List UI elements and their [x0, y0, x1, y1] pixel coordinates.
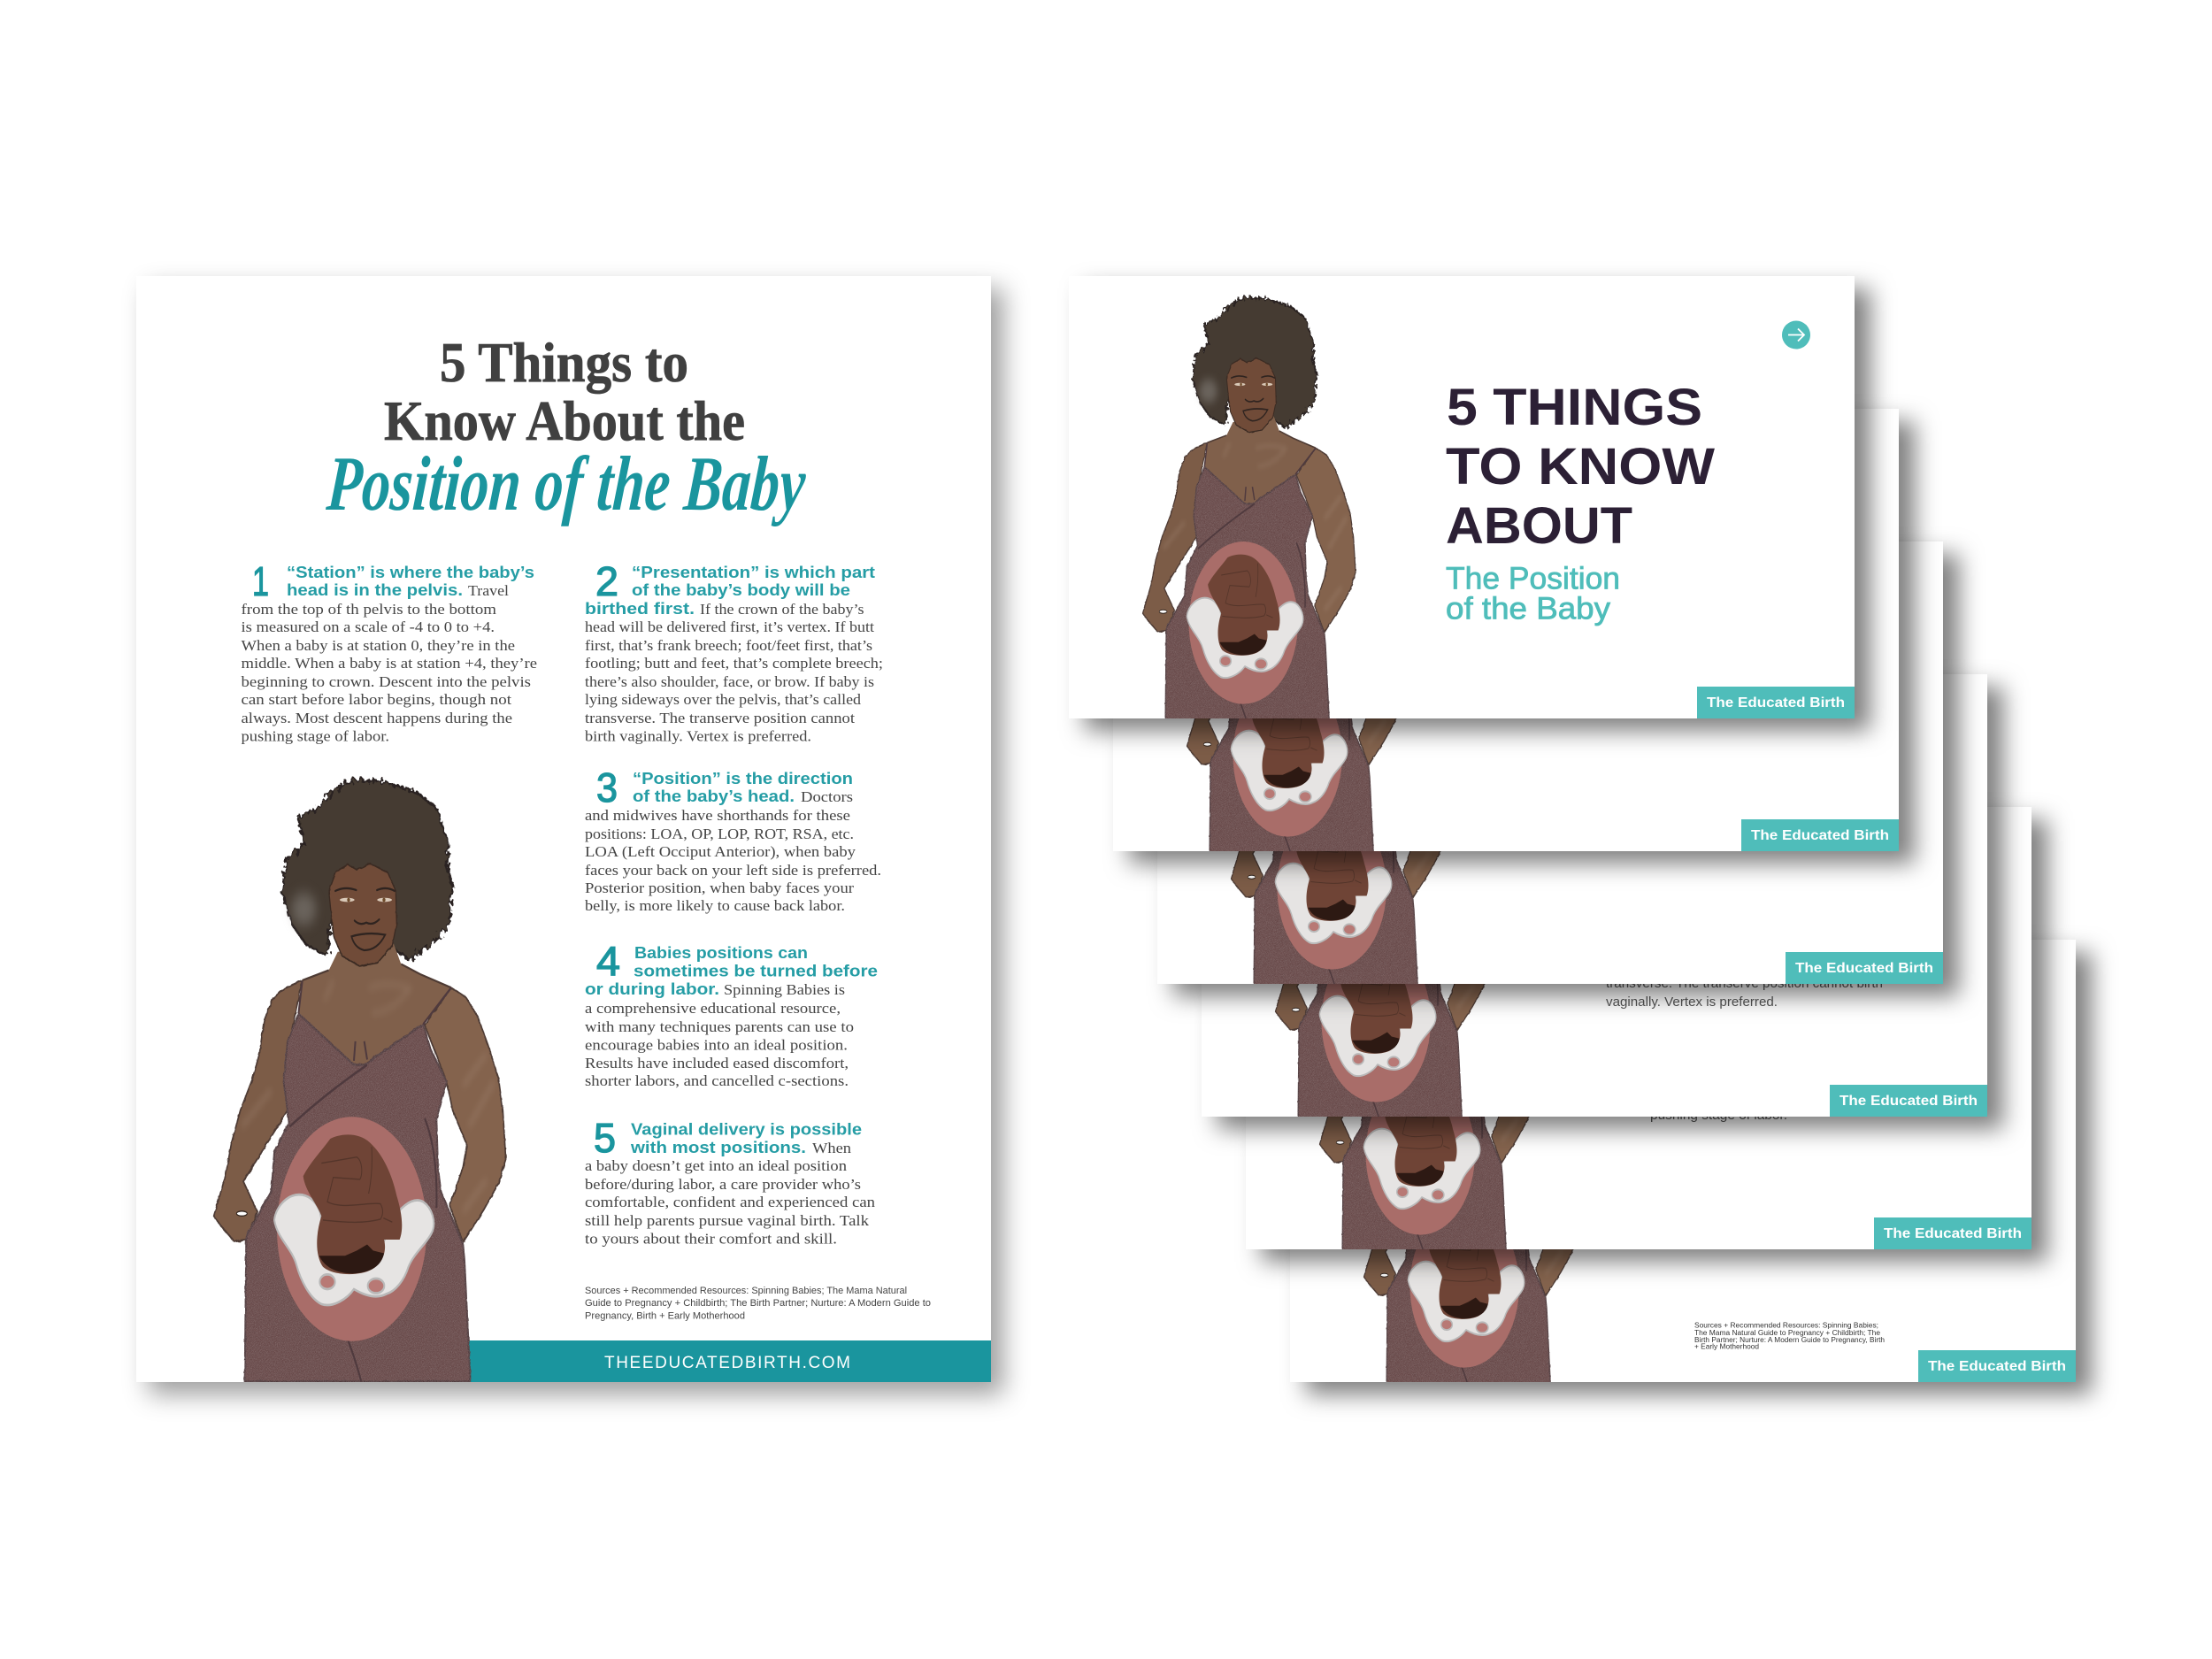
title	[324, 332, 809, 527]
item 1: beginning to crown. Descent into the pelvis	[241, 673, 531, 690]
badge slide 2: The Educated Birth	[1751, 828, 1889, 843]
title: Know About the	[384, 390, 745, 452]
sources	[585, 1286, 931, 1322]
sources text slide 6: The Mama Natural Guide to Pregnancy + Childbirth; The	[1694, 1329, 1881, 1337]
illustration: figure slide 3	[1232, 563, 1444, 999]
item 3: of the baby’s head.	[633, 787, 795, 805]
panel: slide 4	[1202, 674, 1987, 1132]
badge slide 5: The Educated Birth	[1884, 1226, 2022, 1241]
footer bar: THEEDUCATEDBIRTH.COM	[604, 1354, 850, 1372]
badge slide 3	[1786, 952, 1943, 984]
badge slide 3: The Educated Birth	[1795, 961, 1933, 976]
item 4: encourage babies into an ideal position.	[585, 1037, 848, 1053]
item 3: Doctors	[801, 788, 853, 805]
item 3: LOA (Left Occiput Anterior), when baby	[585, 843, 856, 860]
panel: slide 3	[1157, 541, 1943, 999]
slide heading: 5 THINGS	[1447, 379, 1702, 436]
item 1: can start before labor begins, though not	[241, 691, 511, 708]
item 5: with most positions.	[630, 1139, 806, 1156]
item 1: head is in the pelvis.	[287, 581, 463, 599]
item 4: 4	[596, 938, 620, 984]
item 5: a baby doesn’t get into an ideal position	[585, 1157, 848, 1174]
item 3: “Position” is the direction	[633, 770, 853, 787]
item 2: of the baby’s body will be	[632, 581, 850, 599]
body text remnant slide 4: transverse. The transerve position cannot birth	[1606, 976, 1883, 991]
item 3: 3	[596, 764, 618, 810]
slide heading: TO KNOW	[1446, 438, 1715, 495]
item 4: sometimes be turned before	[634, 963, 878, 980]
sources: Pregnancy, Birth + Early Motherhood	[585, 1311, 745, 1322]
item 4: Babies positions can	[634, 944, 808, 962]
item 5: comfortable, confident and experienced can	[585, 1194, 876, 1210]
item 4: or during labor.	[585, 980, 719, 998]
body text remnant slide 4	[1606, 976, 1883, 1010]
item 5	[585, 1115, 876, 1248]
item 2: 2	[595, 558, 618, 604]
item 1: middle. When a baby is at station +4, they’re	[241, 655, 537, 672]
body text remnant slide 5: pushing stage of labor.	[1650, 1108, 1787, 1123]
illustration: figure slide 4	[1276, 695, 1488, 1132]
badge slide 1: The Educated Birth	[1707, 695, 1845, 710]
slide heading	[1446, 379, 1715, 555]
panel: slide 5	[1246, 807, 2032, 1264]
slide subheading	[1446, 561, 1620, 626]
item 3: faces your back on your left side is preferred.	[585, 862, 881, 879]
item 1: from the top of th pelvis to the bottom	[241, 601, 496, 618]
sources text slide 6: Sources + Recommended Resources: Spinning Babies;	[1694, 1322, 1878, 1329]
item 3: belly, is more likely to cause back labor.	[585, 897, 845, 914]
item 2: footling; butt and feet, that’s complete breech;	[585, 655, 883, 672]
item 4: Results have included eased discomfort,	[585, 1055, 849, 1071]
infographic canvas	[133, 272, 2108, 1411]
illustration: figure slide 2	[1187, 430, 1400, 866]
item 5: before/during labor, a care provider who’s	[585, 1176, 861, 1193]
item 5: Vaginal delivery is possible	[631, 1120, 862, 1138]
sources text slide 6: Birth Partner; Nurture: A Modern Guide to Pregnancy, Birth	[1694, 1336, 1885, 1344]
item 5: 5	[594, 1115, 616, 1161]
badge slide 1	[1697, 687, 1855, 718]
sources text slide 6	[1694, 1322, 1885, 1350]
item 2: head will be delivered first, it’s vertex. If butt	[585, 618, 874, 635]
slide subheading: The Position	[1446, 561, 1620, 596]
item 2: first, that’s frank breech; foot/feet first, that’s	[585, 637, 872, 654]
item 4: a comprehensive educational resource,	[585, 1000, 841, 1017]
badge slide 2	[1741, 819, 1899, 851]
illustration: figure slide 5	[1320, 828, 1532, 1264]
item 2: “Presentation” is which part	[632, 564, 875, 581]
title: Position of the Baby	[324, 441, 809, 527]
item 5: When	[812, 1140, 852, 1156]
item 2: lying sideways over the pelvis, that’s called	[585, 691, 862, 708]
item 2: there’s also shoulder, face, or brow. If baby is	[585, 673, 874, 690]
item 3	[585, 764, 881, 914]
illustration: figure slide 6	[1364, 961, 1577, 1397]
item 4: shorter labors, and cancelled c-sections.	[585, 1072, 849, 1089]
item 3: Posterior position, when baby faces your	[585, 879, 854, 896]
badge slide 5	[1874, 1217, 2032, 1249]
item 2: birth vaginally. Vertex is preferred.	[585, 727, 811, 745]
body text remnant slide 4: vaginally. Vertex is preferred.	[1606, 995, 1778, 1010]
badge slide 6: The Educated Birth	[1928, 1359, 2066, 1374]
item 3: positions: LOA, OP, LOP, ROT, RSA, etc.	[585, 826, 854, 842]
panel: printable handout	[136, 276, 991, 1382]
item 3: and midwives have shorthands for these	[585, 807, 850, 824]
sources: Guide to Pregnancy + Childbirth; The Birth Partner; Nurture: A Modern Guide to	[585, 1298, 931, 1309]
panel: slide 2	[1113, 409, 1899, 866]
slide subheading: of the Baby	[1446, 591, 1611, 626]
illustration: figure slide 1	[1143, 297, 1356, 733]
item 1: When a baby is at station 0, they’re in the	[241, 637, 515, 654]
item 4: with many techniques parents can use to	[585, 1018, 854, 1035]
item 2: birthed first.	[585, 600, 695, 618]
item 5: still help parents pursue vaginal birth. Talk	[585, 1212, 870, 1229]
item 2	[585, 558, 883, 745]
item 4	[585, 938, 878, 1089]
footer bar	[467, 1340, 991, 1382]
icon: arrow button	[1782, 320, 1810, 349]
panel: slide 1 cover	[1069, 276, 1855, 733]
illustration: figure handout	[214, 780, 506, 1382]
item 4: Spinning Babies is	[724, 981, 845, 998]
item 1: pushing stage of labor.	[241, 727, 389, 745]
panel: slide 6	[1290, 940, 2076, 1397]
sources text slide 6: + Early Motherhood	[1694, 1343, 1759, 1350]
title: 5 Things to	[440, 332, 688, 394]
badge slide 6	[1918, 1350, 2076, 1382]
item 1: “Station” is where the baby’s	[287, 564, 534, 581]
item 1: always. Most descent happens during the	[241, 710, 512, 726]
item 1	[241, 558, 537, 745]
sources: Sources + Recommended Resources: Spinning Babies; The Mama Natural	[585, 1286, 907, 1296]
badge slide 4	[1830, 1085, 1987, 1117]
item 5: to yours about their comfort and skill.	[585, 1230, 837, 1248]
item 1: Travel	[468, 582, 509, 599]
item 1: 1	[252, 558, 269, 604]
item 2: transverse. The transerve position cannot	[585, 710, 855, 726]
item 2: If the crown of the baby’s	[700, 601, 864, 618]
item 1: is measured on a scale of -4 to 0 to +4.	[241, 618, 495, 635]
slide heading: ABOUT	[1446, 497, 1632, 555]
badge slide 4: The Educated Birth	[1839, 1094, 1978, 1109]
